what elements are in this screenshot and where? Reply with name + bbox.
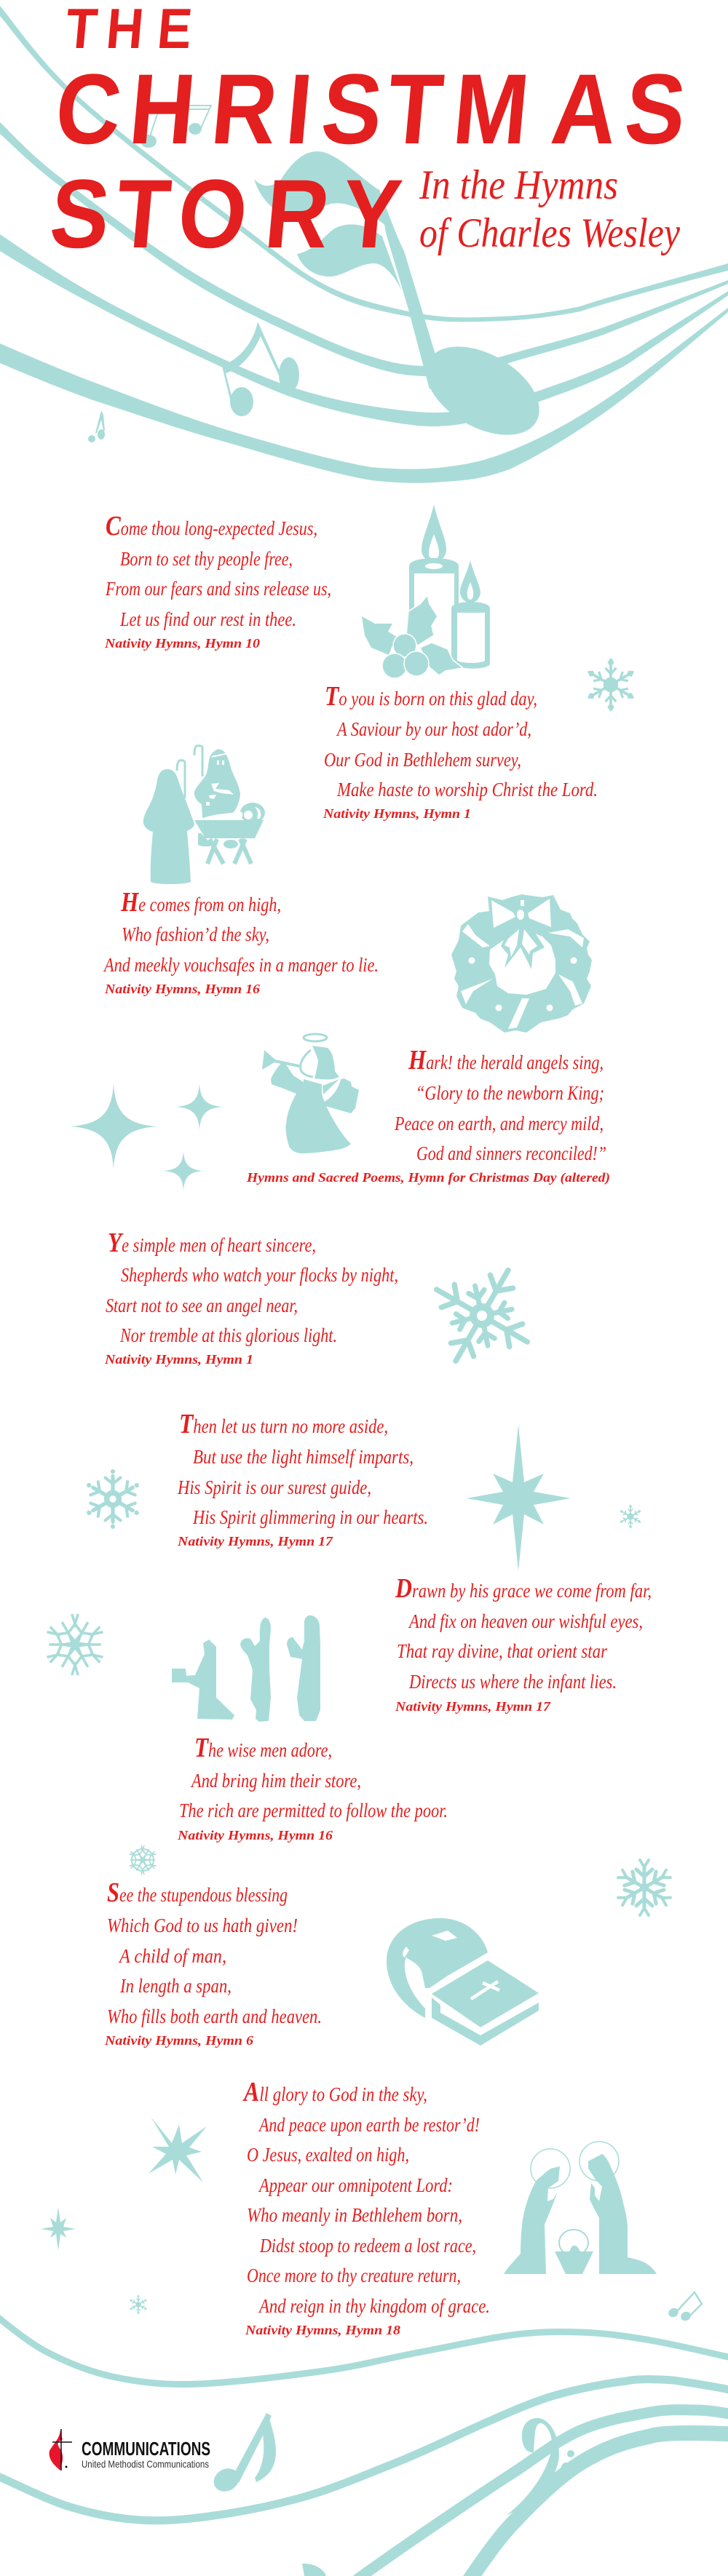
verse lines: A Saviour by our host ador’d,: [336, 718, 531, 740]
berries cutouts: [469, 958, 577, 1011]
verse lines: And fix on heaven our wishful eyes,: [408, 1610, 643, 1632]
halos: [531, 2149, 570, 2188]
verse lines: And bring him their store,: [190, 1770, 361, 1792]
icon: snowflake: [585, 658, 637, 712]
icon: large music note: [254, 151, 555, 453]
citation: Nativity Hymns, Hymn 6: [104, 2033, 253, 2048]
citation: Nativity Hymns, Hymn 16: [177, 1828, 333, 1842]
icon: small double note: [667, 2292, 702, 2323]
bible: [432, 1960, 539, 2027]
verse lines: Come thou long-expected Jesus,: [106, 511, 317, 541]
icon: large snowflake: [430, 1264, 534, 1367]
panel: verse 9: [104, 1877, 322, 2048]
verse lines: Who meanly in Bethlehem born,: [247, 2204, 462, 2226]
icon: note fragment at bottom edge: [302, 2564, 326, 2576]
verse lines: And peace upon earth be restor’d!: [258, 2114, 480, 2136]
verse lines: Then let us turn no more aside,: [179, 1409, 388, 1439]
panel: verse 4: [246, 1045, 610, 1185]
icon: beamed eighth notes: [222, 322, 299, 416]
citation: Nativity Hymns, Hymn 18: [245, 2323, 400, 2337]
ribbons: [461, 924, 584, 1029]
verse lines: A child of man,: [118, 1945, 226, 1967]
citation: Hymns and Sacred Poems, Hymn for Christmas Day (altered): [246, 1170, 610, 1185]
bow tails: [501, 921, 545, 969]
verse lines: He comes from on high,: [120, 887, 281, 918]
panel: verse 7: [395, 1573, 652, 1714]
icon: eighth note: [210, 2413, 276, 2496]
verse lines: His Spirit is our surest guide,: [177, 1476, 371, 1498]
kneeling wise man: [172, 1639, 234, 1720]
verse lines: And meekly vouchsafes in a manger to lie.: [103, 954, 379, 976]
citation: Nativity Hymns, Hymn 17: [395, 1699, 551, 1714]
shepherd figure: [143, 769, 194, 884]
verse lines: His Spirit glimmering in our hearts.: [192, 1506, 428, 1528]
panel: verse 8: [177, 1733, 448, 1842]
verse lines: Directs us where the infant lies.: [408, 1671, 617, 1693]
cross: [471, 1981, 499, 1999]
verse lines: In length a span,: [119, 1975, 232, 1997]
icon: wise men silhouettes: [172, 1615, 320, 1722]
globe: [387, 1918, 488, 2018]
subtitle: [419, 162, 681, 256]
Mary: [588, 2154, 657, 2274]
verse lines: Which God to us hath given!: [107, 1915, 298, 1936]
verse lines: Shepherds who watch your flocks by night,: [121, 1264, 398, 1286]
footer music staff: [0, 2316, 728, 2576]
verse lines: Start not to see an angel near,: [106, 1295, 298, 1316]
icon: small star: [41, 2207, 76, 2251]
verse lines: Ye simple men of heart sincere,: [108, 1228, 316, 1258]
icon: small beamed note: [88, 410, 105, 442]
verse lines: [242, 2077, 490, 2317]
icon: eight point star: [149, 2117, 207, 2182]
panel: verse 1: [104, 511, 331, 651]
panel: verse 10: [242, 2077, 490, 2337]
citation: Nativity Hymns, Hymn 10: [104, 636, 260, 651]
standing wise man: [287, 1615, 320, 1721]
head details: [212, 754, 226, 757]
verse lines: Hark! the herald angels sing,: [408, 1045, 604, 1076]
icon: tiny snowflake: [129, 2294, 148, 2315]
verse lines: God and sinners reconciled!”: [416, 1142, 606, 1164]
verse lines: “Glory to the newborn King;: [416, 1082, 604, 1104]
title: [46, 0, 690, 269]
icon: holy family: [504, 2142, 657, 2274]
icon: bass clef: [506, 2418, 574, 2516]
verse lines: That ray divine, that orient star: [397, 1640, 607, 1662]
baby: [240, 803, 265, 823]
header music staff: [0, 6, 728, 483]
Joseph: [504, 2166, 560, 2274]
verse lines: And reign in thy kingdom of grace.: [258, 2295, 490, 2317]
icon: shepherd and Mary with manger: [143, 746, 265, 884]
verse lines: [103, 887, 379, 976]
halo: [304, 1034, 327, 1041]
icon: snowflake left: [83, 1469, 143, 1529]
Mary figure: [194, 750, 240, 818]
subtitle: of Charles Wesley: [419, 210, 681, 256]
verse lines: The rich are permitted to follow the poor.: [179, 1800, 448, 1821]
verse lines: O Jesus, exalted on high,: [247, 2144, 409, 2166]
standing wise man: [240, 1618, 271, 1722]
citation: Nativity Hymns, Hymn 17: [177, 1534, 333, 1549]
robe: [271, 1062, 351, 1153]
icon: angel with trumpet: [262, 1034, 359, 1153]
verse lines: [107, 1877, 322, 2027]
title line: CHRISTMAS: CHRISTMAS: [51, 53, 690, 164]
icon: wreath: [451, 894, 592, 1033]
icon: candles and holly: [362, 504, 490, 678]
icon: snowflake right: [617, 1860, 672, 1915]
trumpet: [262, 1050, 299, 1070]
wordmark: COMMUNICATIONS: [82, 2438, 210, 2460]
icon: globe and bible: [387, 1918, 539, 2046]
verse lines: All glory to God in the sky,: [242, 2077, 427, 2107]
verse lines: Who fills both earth and heaven.: [107, 2005, 322, 2027]
verse lines: Peace on earth, and mercy mild,: [394, 1113, 604, 1134]
title line: STORY: STORY: [46, 159, 405, 269]
panel: verse 5: [104, 1228, 398, 1367]
panel: verse 6: [177, 1409, 428, 1549]
icon: faint note behind title: [141, 106, 211, 148]
verse lines: From our fears and sins release us,: [105, 578, 331, 600]
verse lines: [177, 1409, 428, 1528]
wing: [323, 1078, 359, 1113]
icons: sparkle stars: [70, 1083, 223, 1191]
citation: Nativity Hymns, Hymn 1: [323, 806, 471, 821]
verse lines: [394, 1045, 606, 1164]
citation: Nativity Hymns, Hymn 16: [104, 982, 260, 996]
verse lines: Once more to thy creature return,: [247, 2265, 461, 2286]
icon: star of Bethlehem: [467, 1425, 571, 1571]
verse lines: Our God in Bethlehem survey,: [324, 749, 521, 771]
basket with child: [559, 2230, 588, 2256]
verse lines: To you is born on this glad day,: [325, 681, 537, 712]
verse lines: But use the light himself imparts,: [193, 1446, 414, 1468]
verse lines: Let us find our rest in thee.: [119, 608, 296, 630]
verse lines: The wise men adore,: [194, 1733, 332, 1763]
head: [312, 1046, 339, 1079]
bow wings and knot: [491, 899, 551, 928]
panel: verse 3: [103, 887, 379, 996]
tagline: United Methodist Communications: [82, 2458, 209, 2470]
icon: outline snowflake: [42, 1614, 108, 1675]
verse lines: [105, 511, 331, 630]
icon: tiny snowflake: [619, 1504, 642, 1529]
verse lines: Didst stoop to redeem a lost race,: [259, 2235, 476, 2257]
verse lines: Appear our omnipotent Lord:: [258, 2174, 453, 2196]
citation: Nativity Hymns, Hymn 1: [104, 1352, 253, 1367]
verse lines: [179, 1733, 448, 1821]
icon: round snowflake: [127, 1845, 159, 1875]
verse lines: [395, 1573, 652, 1693]
verse lines: Make haste to worship Christ the Lord.: [336, 779, 598, 800]
wreath body: [451, 894, 592, 1033]
logo: United Methodist Communications: [50, 2429, 210, 2470]
subtitle: In the Hymns: [419, 162, 618, 208]
wreath centre: [489, 928, 555, 995]
verse lines: [324, 681, 598, 800]
verse lines: Born to set thy people free,: [120, 548, 293, 570]
verse lines: See the stupendous blessing: [107, 1877, 288, 1908]
verse lines: Nor tremble at this glorious light.: [119, 1324, 337, 1346]
manger: [194, 820, 264, 838]
icon: cross and flame: [50, 2429, 72, 2470]
shepherd staffs: [177, 746, 202, 798]
verse lines: [106, 1228, 398, 1346]
verse lines: Drawn by his grace we come from far,: [395, 1573, 652, 1604]
panel: verse 2: [323, 681, 598, 821]
verse lines: Who fashion’d the sky,: [122, 923, 269, 945]
